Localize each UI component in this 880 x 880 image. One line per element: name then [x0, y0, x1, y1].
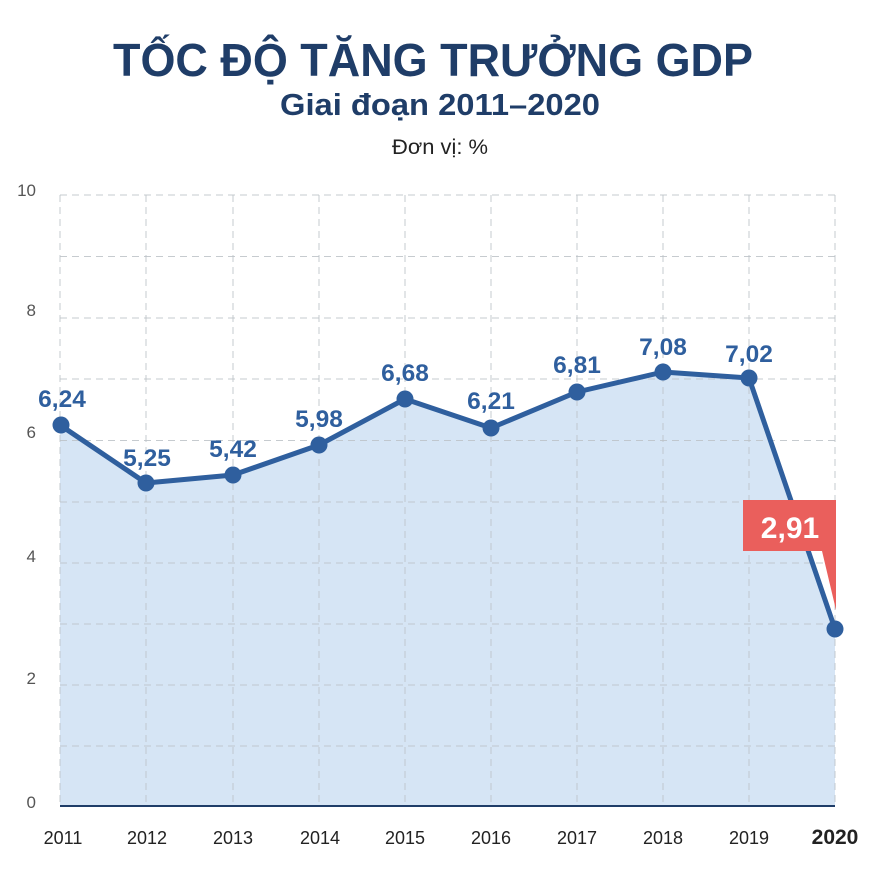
x axis labels: 2020 — [812, 826, 858, 849]
area fill under line — [60, 372, 835, 806]
data value labels: 5,98 — [295, 406, 343, 433]
x axis labels: 2017 — [557, 828, 597, 848]
data value labels: 6,21 — [467, 388, 515, 415]
data points — [52, 364, 844, 638]
x axis labels: 2018 — [643, 828, 683, 848]
y axis labels: 6 — [27, 423, 36, 442]
x axis baseline — [60, 805, 835, 807]
data value labels — [38, 334, 773, 472]
unit label: Đơn vị: % — [392, 136, 488, 159]
data value labels: 5,42 — [209, 436, 257, 463]
x axis labels: 2014 — [300, 828, 340, 848]
data line — [60, 372, 835, 629]
y axis labels: 0 — [27, 793, 36, 812]
x axis labels: 2011 — [44, 828, 82, 848]
x axis labels: 2013 — [213, 828, 253, 848]
x axis labels: 2016 — [471, 828, 511, 848]
x axis labels: 2019 — [729, 828, 769, 848]
data value labels: 7,08 — [639, 334, 687, 361]
callout: 2020 value — [743, 500, 836, 610]
y axis labels: 10 — [17, 181, 36, 200]
y axis labels: 2 — [27, 669, 36, 688]
y axis labels — [17, 181, 36, 812]
y axis labels: 4 — [27, 547, 36, 566]
x axis labels: 2015 — [385, 828, 425, 848]
x axis labels: 2012 — [127, 828, 167, 848]
data value labels: 6,68 — [381, 360, 429, 387]
grid lines — [60, 195, 835, 806]
data value labels: 6,81 — [553, 352, 601, 379]
callout: 2020 value: 2,91 — [761, 512, 819, 545]
data value labels: 6,24 — [38, 386, 86, 413]
y axis labels: 8 — [27, 301, 36, 320]
subtitle: Giai đoạn 2011–2020 — [280, 87, 600, 122]
data value labels: 7,02 — [725, 341, 773, 368]
data value labels: 5,25 — [123, 445, 171, 472]
title: TỐC ĐỘ TĂNG TRƯỞNG GDP — [113, 34, 753, 86]
x axis labels — [44, 826, 858, 849]
